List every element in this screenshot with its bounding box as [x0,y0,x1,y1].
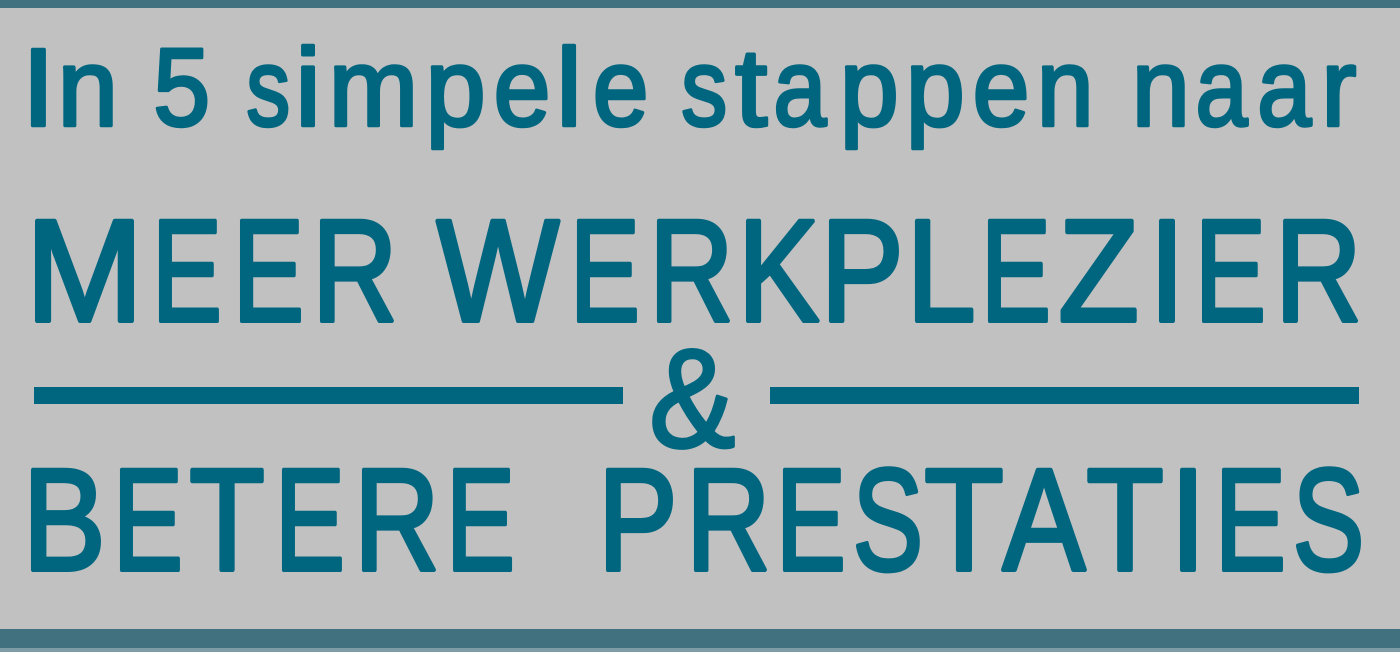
heading: betere prestaties: T [1086,439,1164,601]
heading: meer werkplezier: W [437,190,559,352]
heading: meer werkplezier: M [26,190,143,352]
intro heading: l [556,26,582,149]
heading: meer werkplezier: Z [1058,190,1139,352]
intro heading: n [58,26,118,149]
heading: betere prestaties: E [113,439,183,601]
heading: meer werkplezier: E [570,190,640,352]
intro heading: e [593,26,648,149]
intro heading: n [1132,26,1190,149]
intro heading: 5 [153,26,210,149]
heading: meer werkplezier: E [233,190,304,352]
heading: meer werkplezier: E [1195,190,1266,352]
heading: meer werkplezier: R [312,190,398,352]
ampersand: & [649,319,736,477]
heading: meer werkplezier: E [152,190,222,352]
heading: meer werkplezier: R [1275,190,1362,352]
heading: betere prestaties: R [686,439,770,601]
heading: betere prestaties: T [924,439,1004,601]
heading: meer werkplezier: L [907,190,976,352]
intro heading: a [1257,26,1312,149]
heading: betere prestaties: B [23,439,106,601]
heading: meer werkplezier: K [738,190,819,352]
intro heading: I [22,26,55,149]
heading: betere prestaties: P [598,439,677,601]
intro heading: a [773,26,827,149]
intro heading: p [906,26,965,149]
heading: betere prestaties: E [1215,439,1286,601]
intro heading: a [1196,26,1248,149]
intro heading: p [426,26,486,149]
heading: meer werkplezier: R [649,190,734,352]
heading: betere prestaties: S [853,439,923,601]
heading: betere prestaties: S [1293,439,1364,601]
heading: meer werkplezier: I [1149,190,1185,352]
left divider line [34,387,623,404]
right divider line [770,387,1359,404]
intro heading: s [681,26,727,149]
intro heading: m [329,26,418,149]
bottom border bar [0,629,1400,652]
intro heading: e [973,26,1030,149]
intro heading: s [246,26,290,149]
heading: betere prestaties: E [776,439,846,601]
heading: meer werkplezier: E [981,190,1051,352]
heading: betere prestaties: T [189,439,265,601]
heading: betere prestaties: R [354,439,440,601]
intro heading: i [295,26,321,149]
intro heading: t [735,26,767,149]
intro heading: p [840,26,899,149]
heading: betere prestaties: A [1003,439,1085,601]
top border bar [0,0,1400,8]
intro heading: e [494,26,550,149]
heading: betere prestaties: E [275,439,345,601]
heading: betere prestaties: I [1170,439,1206,601]
intro heading: n [1037,26,1094,149]
intro heading: r [1321,26,1356,149]
heading: betere prestaties: E [446,439,515,601]
heading: meer werkplezier: P [821,190,904,352]
